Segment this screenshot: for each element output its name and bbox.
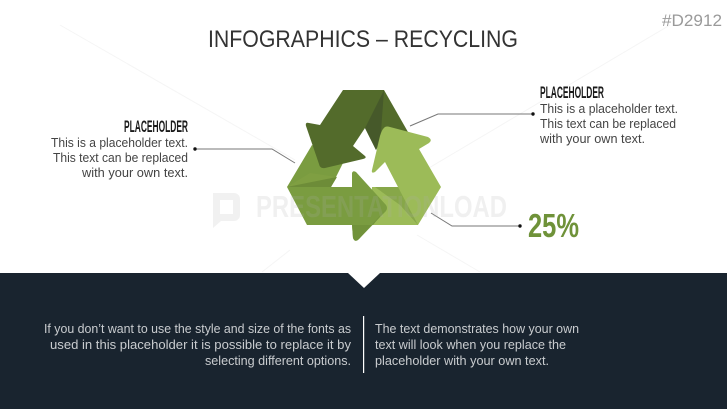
left connector xyxy=(193,147,295,163)
footer left text xyxy=(44,321,351,368)
footer left text: selecting different options. xyxy=(205,353,351,368)
footer right text: The text demonstrates how your own xyxy=(375,321,579,336)
right callout text: with your own text. xyxy=(539,131,645,146)
mid green arrow xyxy=(287,145,387,241)
right callout text xyxy=(539,84,678,146)
dark green arrow head xyxy=(306,90,384,168)
watermark: PRESENTATIONLOAD xyxy=(256,189,507,224)
left callout text: This is a placeholder text. xyxy=(51,135,188,150)
footer divider xyxy=(363,316,364,373)
left callout text xyxy=(51,118,188,180)
percentage connector xyxy=(431,213,522,228)
percentage value: 25% xyxy=(528,207,579,244)
right callout text: This is a placeholder text. xyxy=(540,101,678,116)
footer right text: text will look when you replace the xyxy=(375,337,566,352)
watermark xyxy=(213,189,507,228)
dark arrow band xyxy=(343,90,408,150)
footer left text: If you don’t want to use the style and size of the fonts as xyxy=(44,321,351,336)
right callout text: PLACEHOLDER xyxy=(540,84,604,102)
dark footer band xyxy=(0,273,727,409)
footer right text: placeholder with your own text. xyxy=(375,353,549,368)
left callout text: PLACEHOLDER xyxy=(124,118,188,136)
product code: #D2912 xyxy=(662,11,722,30)
notch xyxy=(348,273,380,288)
footer right text xyxy=(375,321,579,368)
left callout text: This text can be replaced xyxy=(53,150,188,165)
recycling icon xyxy=(287,90,441,241)
left callout text: with your own text. xyxy=(81,165,188,180)
right callout text: This text can be replaced xyxy=(540,116,676,131)
right connector xyxy=(410,112,535,126)
title: INFOGRAPHICS – RECYCLING xyxy=(208,26,518,53)
light arrow fold xyxy=(375,187,418,225)
footer left text: used in this placeholder it is possible to replace it by xyxy=(50,337,351,352)
light green arrow xyxy=(370,126,441,225)
